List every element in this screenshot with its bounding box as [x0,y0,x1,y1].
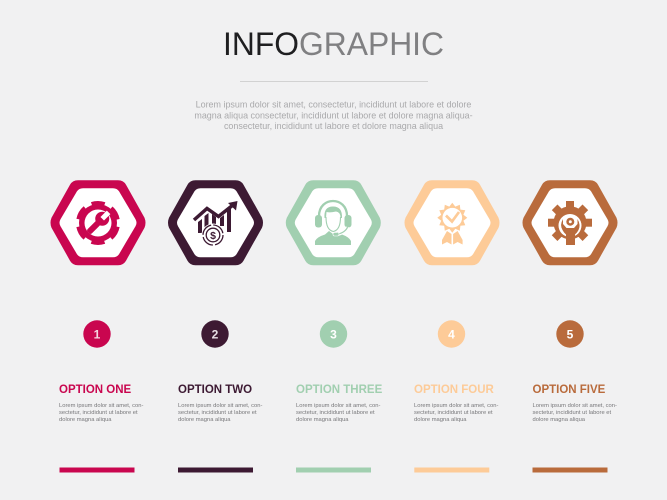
number badge 3: 3 [330,328,337,342]
option two text: dolore magna aliqua [178,417,231,423]
option three text: sectetur, incididunt ut labore et [296,410,375,416]
icon: chart with arrow and coin: $ [210,230,216,242]
option five text: dolore magna aliqua [532,417,586,423]
icon: agent with headset [315,201,352,245]
option four text: OPTION FOUR [414,384,495,396]
icon: gear with wrench [78,204,118,242]
option one text: OPTION ONE [59,384,132,396]
icon: gear with open wrench [548,201,592,245]
option two text: OPTION TWO [178,384,252,396]
number badge 2 [201,320,229,348]
hexagon 2: growth chart and dollar [168,180,263,265]
title: INFOGRAPHIC [223,26,444,62]
bar: option one [60,468,134,472]
intro paragraph [194,100,473,131]
intro paragraph: magna aliqua consectetur, incididunt ut labore et dolore magna aliqua- [194,110,473,120]
option four text: dolore magna aliqua [414,417,467,423]
intro paragraph: consectetur, incididunt ut labore et dolore magna aliqua [224,121,443,131]
option one text [59,384,143,423]
bar: option three [296,468,371,472]
option three text: OPTION THREE [296,384,383,396]
option one text: Lorem ipsum dolor sit amet, con- [59,403,143,409]
bar: option five [532,468,608,472]
option five text: OPTION FIVE [532,384,606,396]
option four text: sectetur, incididunt ut labore et [414,410,493,416]
number badge 2: 2 [212,328,219,342]
option five text: Lorem ipsum dolor sit amet, con- [532,403,617,409]
option three text [296,384,383,423]
hexagon 1: gear and wrench [50,180,146,265]
option two text [178,384,262,423]
bar: option four [414,468,489,472]
option four text [414,384,498,423]
hexagon 3: support agent [286,180,381,265]
number badge 3 [320,320,347,348]
option five text: sectetur, incididunt ut labore et [532,410,612,416]
option three text: dolore magna aliqua [296,417,349,423]
number badge 5: 5 [567,328,574,342]
number badge 4 [438,320,465,348]
number badge 1: 1 [94,328,101,342]
option one text: sectetur, incididunt ut labore et [59,410,138,416]
hexagon 4: award badge [404,180,500,265]
option two text: sectetur, incididunt ut labore et [178,410,257,416]
bar: option two [178,468,253,472]
icon: badge with check [437,203,467,244]
option five text [532,384,617,423]
option two text: Lorem ipsum dolor sit amet, con- [178,403,262,409]
intro paragraph: Lorem ipsum dolor sit amet, consectetur, incididunt ut labore et dolore [196,100,471,110]
number badge 5 [556,320,584,348]
option three text: Lorem ipsum dolor sit amet, con- [296,403,380,409]
option one text: dolore magna aliqua [59,417,112,423]
hexagon 5: gear with wrench [522,180,618,265]
number badge 1 [83,320,111,348]
option four text: Lorem ipsum dolor sit amet, con- [414,403,498,409]
number badge 4: 4 [448,328,455,342]
